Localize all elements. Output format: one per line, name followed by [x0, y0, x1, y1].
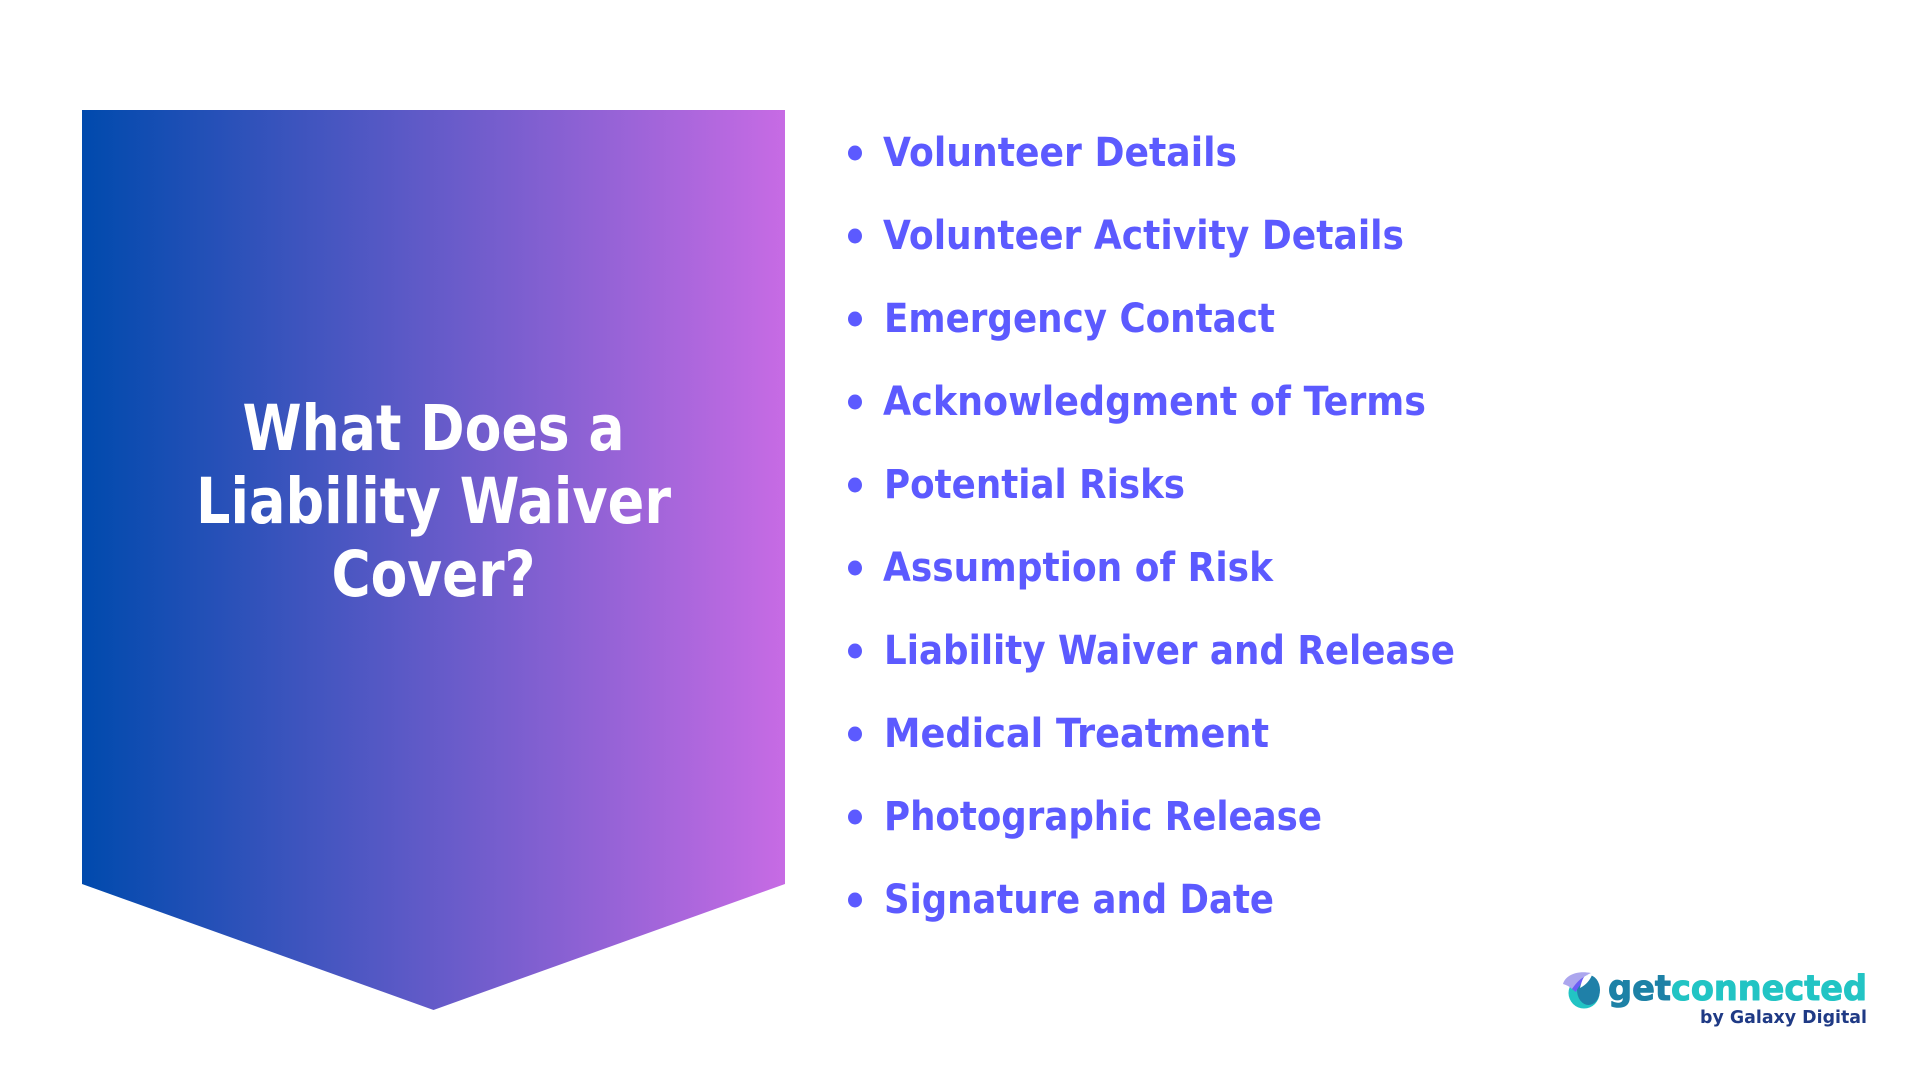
item: Acknowledgment of Terms: Acknowledgment of Terms [883, 379, 1426, 425]
heading: What Does a [242, 392, 624, 465]
heading [196, 392, 671, 611]
item: Volunteer Details: Volunteer Details [883, 130, 1237, 176]
item: Emergency Contact: Emergency Contact [884, 296, 1275, 342]
bullet list [848, 130, 1455, 923]
logo: getconnected by Galaxy Digital [1563, 969, 1867, 1028]
item: Potential Risks: Potential Risks [884, 462, 1185, 508]
panel: chevron banner [82, 110, 785, 1010]
heading: Cover? [332, 538, 536, 611]
logo: getconnected by Galaxy Digital: connected [1671, 969, 1867, 1009]
heading: Liability Waiver [196, 465, 671, 538]
tagline: by Galaxy Digital [1700, 1008, 1867, 1028]
item: Signature and Date: Signature and Date [884, 877, 1274, 923]
item: Liability Waiver and Release: Liability Waiver and Release [884, 628, 1455, 674]
item: Volunteer Activity Details: Volunteer Activity Details [883, 213, 1404, 259]
item: Medical Treatment: Medical Treatment [884, 711, 1269, 757]
item: Photographic Release: Photographic Release [884, 794, 1322, 840]
icon: logo mark [1563, 972, 1600, 1008]
wordmark: get [1608, 969, 1671, 1009]
item: Assumption of Risk: Assumption of Risk [883, 545, 1274, 591]
